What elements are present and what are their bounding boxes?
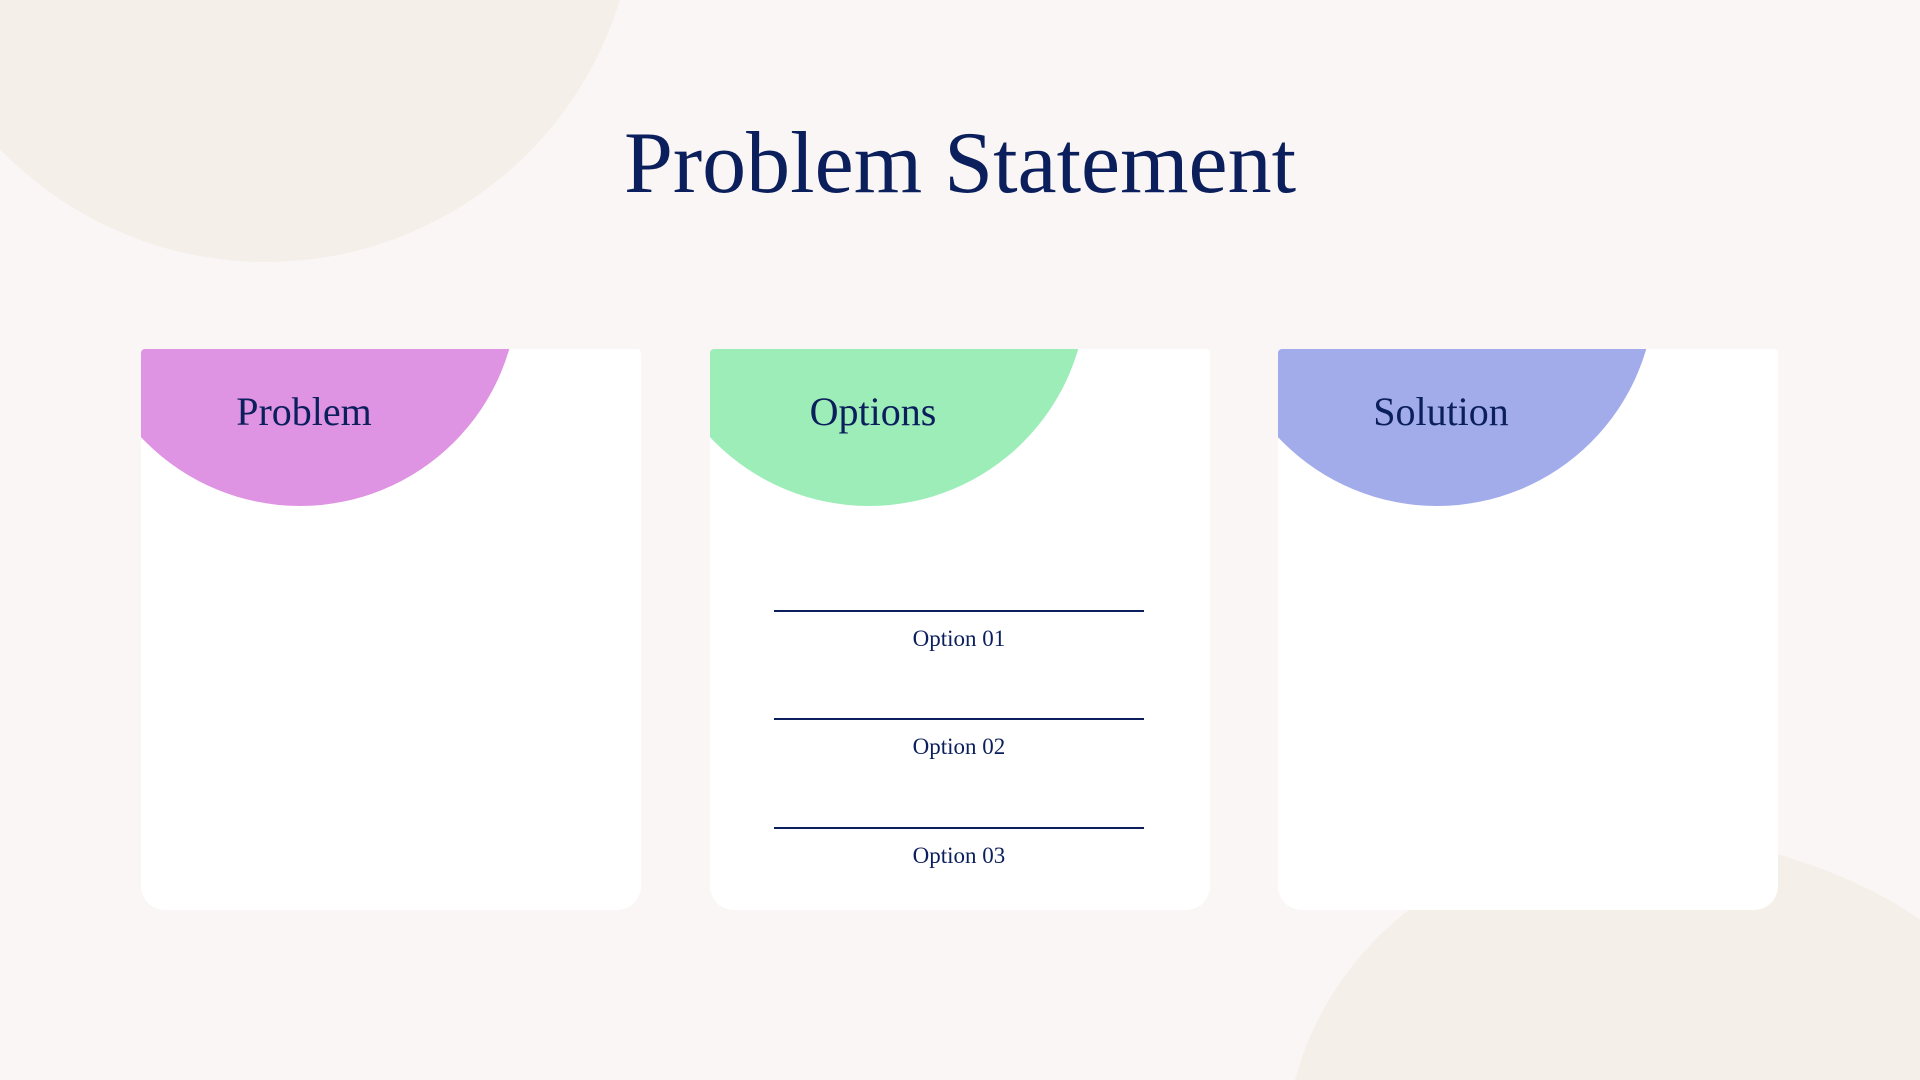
option 02: Option 02	[913, 734, 1005, 759]
option 03: Option 03	[913, 843, 1005, 868]
option 03	[774, 827, 1144, 871]
option 02	[774, 718, 1144, 762]
title: Problem Statement	[624, 115, 1296, 212]
panel: options	[710, 349, 1210, 910]
panel: solution	[1278, 349, 1778, 910]
option 01: Option 01	[913, 626, 1005, 651]
heading: problem: Problem	[236, 389, 372, 434]
heading: options: Options	[810, 389, 936, 434]
option 01	[774, 610, 1144, 654]
heading: solution: Solution	[1373, 389, 1509, 434]
panel: problem	[141, 349, 641, 910]
